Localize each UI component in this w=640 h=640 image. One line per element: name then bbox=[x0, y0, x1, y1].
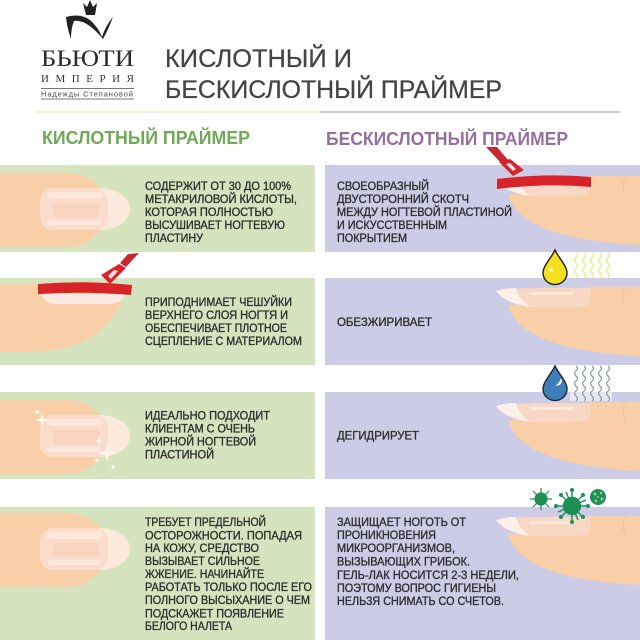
icon: blue water drop bbox=[543, 366, 567, 400]
panel: acid-free 1 bbox=[325, 147, 640, 252]
panel: acid 2 bbox=[0, 253, 315, 365]
title: БЕСКИСЛОТНЫЙ ПРАЙМЕР bbox=[165, 74, 502, 104]
text: acid 4: ЖЖЕНИЕ. НАЧИНАЙТЕ bbox=[145, 568, 264, 581]
text: acid 2: ПРИПОДНИМАЕТ ЧЕШУЙКИ bbox=[145, 296, 292, 309]
text: acid-free 1: СВОЕОБРАЗНЫЙ bbox=[337, 180, 429, 193]
text: acid 3 bbox=[145, 410, 270, 462]
logo subtitle: ИМПЕРИЯ bbox=[41, 73, 135, 85]
text: acid 2: ВЕРХНЕГО СЛОЯ НОГТЯ И bbox=[145, 310, 288, 322]
text: acid 4: ПОДСКАЖЕТ ПОЯВЛЕНИЕ bbox=[145, 608, 284, 620]
icon: primer brush bbox=[101, 253, 139, 284]
text: acid-free 1: МЕЖДУ НОГТЕВОЙ ПЛАСТИНОЙ bbox=[337, 206, 512, 219]
icon: finger top view bbox=[0, 513, 130, 587]
panel: acid 4 bbox=[0, 507, 315, 640]
icon: finger top view bbox=[0, 400, 130, 474]
text: acid 2: СЦЕПЛЕНИЕ С МАТЕРИАЛОМ bbox=[145, 336, 302, 348]
panel: acid 3 bbox=[0, 392, 315, 479]
text: acid 3: КЛИЕНТАМ С ОЧЕНЬ bbox=[145, 424, 255, 436]
icon: round bacterium bbox=[590, 489, 606, 505]
panel: acid-free 2 bbox=[325, 278, 640, 365]
icon: finger side view bbox=[496, 402, 640, 471]
heading: acid-free primer: БЕСКИСЛОТНЫЙ ПРАЙМЕР bbox=[326, 128, 568, 149]
text: acid-free 1 bbox=[337, 180, 512, 245]
icon: sparkles bbox=[34, 409, 116, 469]
text: acid 2 bbox=[145, 296, 302, 348]
text: acid-free 1: ДВУСТОРОННИЙ СКОТЧ bbox=[337, 193, 469, 206]
icon: small virus bbox=[530, 488, 552, 510]
text: acid-free 4: МИКРООРГАНИЗМОВ, bbox=[337, 543, 455, 555]
icon: blue water waves bbox=[570, 366, 612, 401]
icon: nail tip bbox=[40, 294, 125, 304]
title bbox=[165, 43, 502, 104]
text: acid 4: ОСТОРОЖНОСТИ. ПОПАДАЯ bbox=[145, 530, 302, 542]
panel: acid-free 4 bbox=[325, 507, 640, 640]
logo bbox=[41, 0, 135, 100]
text: acid-free 4: ПОЭТОМУ ВОПРОС ГИГИЕНЫ bbox=[337, 583, 496, 595]
icon: yellow oil waves bbox=[570, 252, 612, 278]
text: acid-free 4 bbox=[337, 517, 519, 608]
text: acid 3: ЖИРНОЙ НОГТЕВОЙ bbox=[145, 436, 256, 448]
text: acid 4: НА КОЖУ, СРЕДСТВО bbox=[145, 543, 259, 555]
logo tagline: Надежды Степановой bbox=[41, 90, 133, 98]
panel: acid-free 3 bbox=[325, 392, 640, 479]
icon: primer brush bbox=[486, 147, 524, 176]
text: acid-free 4: ВЫЗЫВАЮЩИХ ГРИБОК. bbox=[337, 556, 470, 568]
text: acid-free 4: ПРОНИКНОВЕНИЯ bbox=[337, 530, 436, 542]
text: acid 4: ТРЕБУЕТ ПРЕДЕЛЬНОЙ bbox=[145, 516, 266, 529]
text: acid-free 1: И ИСКУССТВЕННЫМ bbox=[337, 220, 447, 232]
icon: large virus bbox=[555, 489, 589, 523]
icon: finger side view bbox=[496, 516, 640, 585]
text: acid 4: РАБОТАТЬ ТОЛЬКО ПОСЛЕ ЕГО bbox=[145, 582, 312, 594]
panel: acid 1 bbox=[0, 165, 315, 252]
text: acid 1: КОТОРАЯ ПОЛНОСТЬЮ bbox=[145, 207, 273, 219]
icon: yellow oil drop bbox=[543, 250, 567, 284]
icon: primer band bbox=[497, 175, 591, 189]
icon: finger side view bbox=[496, 287, 640, 356]
text: acid 3: ПЛАСТИНОЙ bbox=[145, 448, 214, 462]
text: acid 4: ВЫЗЫВАЕТ СИЛЬНОЕ bbox=[145, 556, 260, 568]
text: acid 1: ПЛАСТИНУ bbox=[145, 233, 204, 245]
text: acid-free 1: ПОКРЫТИЕМ bbox=[337, 233, 407, 245]
text: acid 1: СОДЕРЖИТ ОТ 30 ДО 100% bbox=[145, 181, 291, 193]
text: acid-free 3: ДЕГИДРИРУЕТ bbox=[337, 430, 419, 442]
icon: finger side view bbox=[0, 284, 124, 352]
heading: acid primer: КИСЛОТНЫЙ ПРАЙМЕР bbox=[42, 127, 250, 148]
text: acid 4: ПОЛНОГО ВЫСЫХАНИЕ О ЧЕМ bbox=[145, 595, 310, 607]
text: acid 3: ИДЕАЛЬНО ПОДХОДИТ bbox=[145, 410, 270, 422]
icon: finger top view bbox=[0, 173, 130, 247]
icon: logo swoosh bbox=[66, 16, 113, 39]
text: acid-free 4: НЕЛЬЗЯ СНИМАТЬ СО СЧЕТОВ. bbox=[337, 596, 504, 608]
icon: finger side view bbox=[496, 176, 640, 245]
text: acid 1: ВЫСУШИВАЕТ НОГТЕВУЮ bbox=[145, 220, 285, 232]
text: acid-free 2: ОБЕЗЖИРИВАЕТ bbox=[337, 317, 432, 329]
logo name: БЬЮТИ bbox=[41, 46, 134, 71]
title: КИСЛОТНЫЙ И bbox=[165, 43, 352, 73]
text: acid 1 bbox=[145, 181, 297, 245]
text: acid 4: БЕЛОГО НАЛЕТА bbox=[145, 621, 232, 633]
icon: primer band bbox=[38, 282, 132, 295]
text: acid-free 4: ЗАЩИЩАЕТ НОГОТЬ ОТ bbox=[337, 517, 466, 529]
text: acid 4 bbox=[145, 516, 312, 633]
text: acid 1: МЕТАКРИЛОВОЙ КИСЛОТЫ, bbox=[145, 193, 297, 206]
icon: crown bbox=[83, 0, 97, 15]
text: acid 2: ОБЕСПЕЧИВАЕТ ПЛОТНОЕ bbox=[145, 323, 287, 335]
text: acid-free 4: ГЕЛЬ-ЛАК НОСИТСЯ 2-3 НЕДЕЛИ, bbox=[337, 570, 519, 582]
